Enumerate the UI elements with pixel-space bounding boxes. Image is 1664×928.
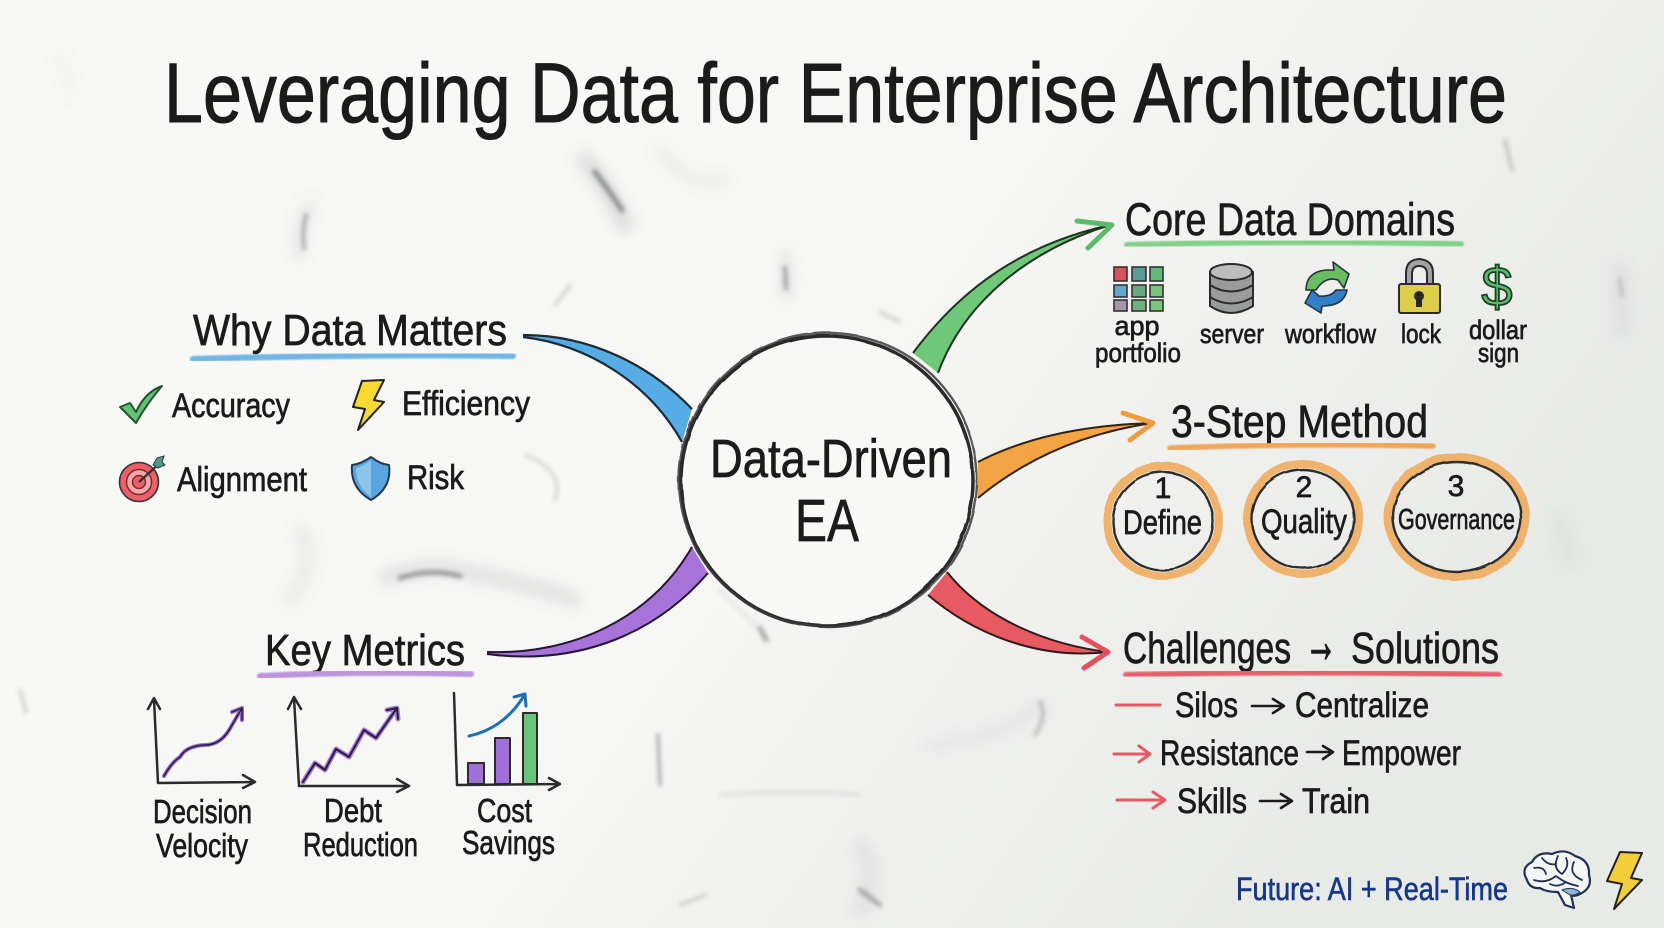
row: Skills to Train [1117,782,1370,821]
heading: Challenges → Solutions [1123,607,1499,676]
label: lock: lock [1401,319,1441,349]
icon: check mark [120,386,162,423]
heading: Why Data Matters: Why Data Matters [193,306,507,355]
footer note: Future AI + Real-Time: Future: AI + Real-Time [1236,871,1508,907]
label: Debt Reduction [303,792,418,863]
label: app portfolio [1095,311,1181,368]
step 2: Quality [1247,464,1359,574]
branch arrow: purple to Key Metrics [487,547,708,656]
icon: app portfolio grid [1114,267,1163,311]
label: dollar sign: sign [1478,338,1519,368]
row: Skills to Train: Skills [1177,782,1247,821]
icon: workflow cycle arrows [1305,262,1349,313]
row: Resistance to Empower: Resistance [1160,734,1299,773]
step 1: Define: Define [1123,504,1202,542]
label: Cost Savings: Savings [462,824,555,861]
label: Cost Savings [462,792,555,861]
icon: brain [1524,851,1590,908]
icon: future lightning bolt [1607,852,1642,909]
panel: Core Data Domains [1095,194,1527,368]
step 3: Governance: Governance [1398,504,1515,536]
central hub: Data-Driven EA: EA [795,488,860,554]
label: workflow: workflow [1284,319,1376,349]
step 3: Governance: 3 [1448,470,1464,503]
icon: dollar sign: $ [1481,255,1513,318]
heading: 3-Step Method: 3-Step Method [1171,396,1428,447]
label: Debt Reduction: Debt [324,792,382,829]
panel: Challenges and Solutions [1114,607,1499,821]
label: server: server [1200,319,1264,349]
step 3: Governance [1388,457,1526,577]
label: Decision Velocity [153,793,252,864]
row: Silos to Centralize [1116,686,1429,725]
row: Silos to Centralize: Silos [1175,686,1238,725]
step 2: Quality: Quality [1261,503,1347,541]
step 1: Define [1107,466,1219,576]
step 1: Define: 1 [1155,472,1171,505]
branch arrow: blue to Why Data Matters [523,335,692,442]
icon: server [1210,264,1253,313]
row: Skills to Train: Train [1302,782,1370,821]
icon: lock [1399,259,1440,313]
label: app portfolio: portfolio [1095,338,1181,368]
label: Decision Velocity: Decision [153,793,252,830]
label: dollar sign [1469,315,1527,368]
row: Resistance to Empower [1114,734,1461,773]
panel: Why Data Matters [120,306,530,502]
label: Alignment: Alignment [177,461,307,499]
chart: Decision Velocity [148,698,255,788]
heading: Challenges → Solutions: Challenges [1123,624,1291,673]
label: Risk: Risk [407,459,465,497]
label: Decision Velocity: Velocity [156,827,248,864]
label: Debt Reduction: Reduction [303,826,418,863]
central hub: Data-Driven EA: Data-Driven [710,429,952,489]
central hub: Data-Driven EA [679,333,977,627]
heading: Key Metrics: Key Metrics [265,626,465,675]
chart: Cost Savings [454,693,560,790]
row: Silos to Centralize: Centralize [1295,686,1429,725]
icon: lightning bolt [353,380,384,430]
branch arrow: green to Core Data Domains [913,221,1112,373]
heading: Challenges → Solutions: → [1305,607,1337,676]
icon: shield [352,457,389,500]
heading: Challenges → Solutions: Solutions [1351,624,1499,673]
heading: Core Data Domains: Core Data Domains [1125,194,1455,245]
label: dollar sign: dollar [1469,315,1527,345]
step 2: Quality: 2 [1296,471,1312,504]
panel: 3-Step Method [1107,396,1526,577]
panel: Key Metrics [148,626,560,864]
label: Accuracy: Accuracy [172,387,290,425]
icon: target [120,456,165,502]
label: Cost Savings: Cost [477,792,532,829]
label: Efficiency: Efficiency [402,385,530,423]
label: app portfolio: app [1114,311,1160,341]
branch arrow: red to Challenges and Solutions [928,572,1108,668]
chart: Debt Reduction [288,697,409,792]
branch arrow: orange to 3-Step Method [978,413,1153,498]
row: Resistance to Empower: Empower [1342,734,1461,773]
